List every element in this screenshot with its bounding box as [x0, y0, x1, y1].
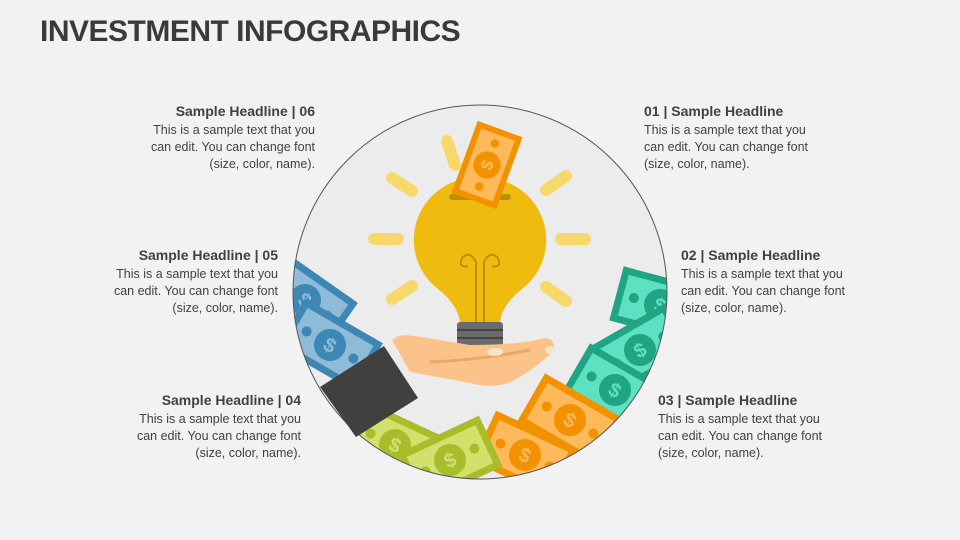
text block 06: Sample Headline | 06 [176, 103, 315, 119]
text block 04: (size, color, name). [195, 446, 301, 460]
text block 06: This is a sample text that you [153, 123, 315, 137]
text block 02: 02 | Sample Headline [681, 247, 820, 263]
title: INVESTMENT INFOGRAPHICS [40, 15, 460, 48]
text block 05 [114, 247, 278, 315]
text block 02: can edit. You can change font [681, 284, 845, 298]
text block 04 [137, 392, 301, 460]
central illustration [292, 104, 668, 480]
text block 06: (size, color, name). [209, 157, 315, 171]
icon: light rays [374, 140, 585, 301]
text block 03: 03 | Sample Headline [658, 392, 797, 408]
icon: blue bills [294, 260, 383, 379]
text block 03: (size, color, name). [658, 446, 764, 460]
text block 06: can edit. You can change font [151, 140, 315, 154]
icon: hand [320, 335, 555, 437]
text block 01 [644, 103, 808, 171]
text block 02: This is a sample text that you [681, 267, 843, 281]
icon: teal bills [566, 266, 666, 416]
text block 01: This is a sample text that you [644, 123, 806, 137]
text block 01: (size, color, name). [644, 157, 750, 171]
text block 01: can edit. You can change font [644, 140, 808, 154]
text block 03 [658, 392, 822, 460]
text block 05: This is a sample text that you [116, 267, 278, 281]
icon: orange bills [486, 373, 620, 477]
text block 02 [681, 247, 845, 315]
text block 04: Sample Headline | 04 [162, 392, 301, 408]
icon: orange bill in bulb [452, 121, 522, 209]
icon: green bills [360, 414, 502, 478]
text block 01: 01 | Sample Headline [644, 103, 783, 119]
text block 06 [151, 103, 315, 171]
icon: light bulb [414, 178, 546, 347]
text block 05: Sample Headline | 05 [139, 247, 278, 263]
text block 04: can edit. You can change font [137, 429, 301, 443]
text block 05: can edit. You can change font [114, 284, 278, 298]
text block 04: This is a sample text that you [139, 412, 301, 426]
text block 05: (size, color, name). [172, 301, 278, 315]
text block 03: can edit. You can change font [658, 429, 822, 443]
text block 03: This is a sample text that you [658, 412, 820, 426]
text block 02: (size, color, name). [681, 301, 787, 315]
